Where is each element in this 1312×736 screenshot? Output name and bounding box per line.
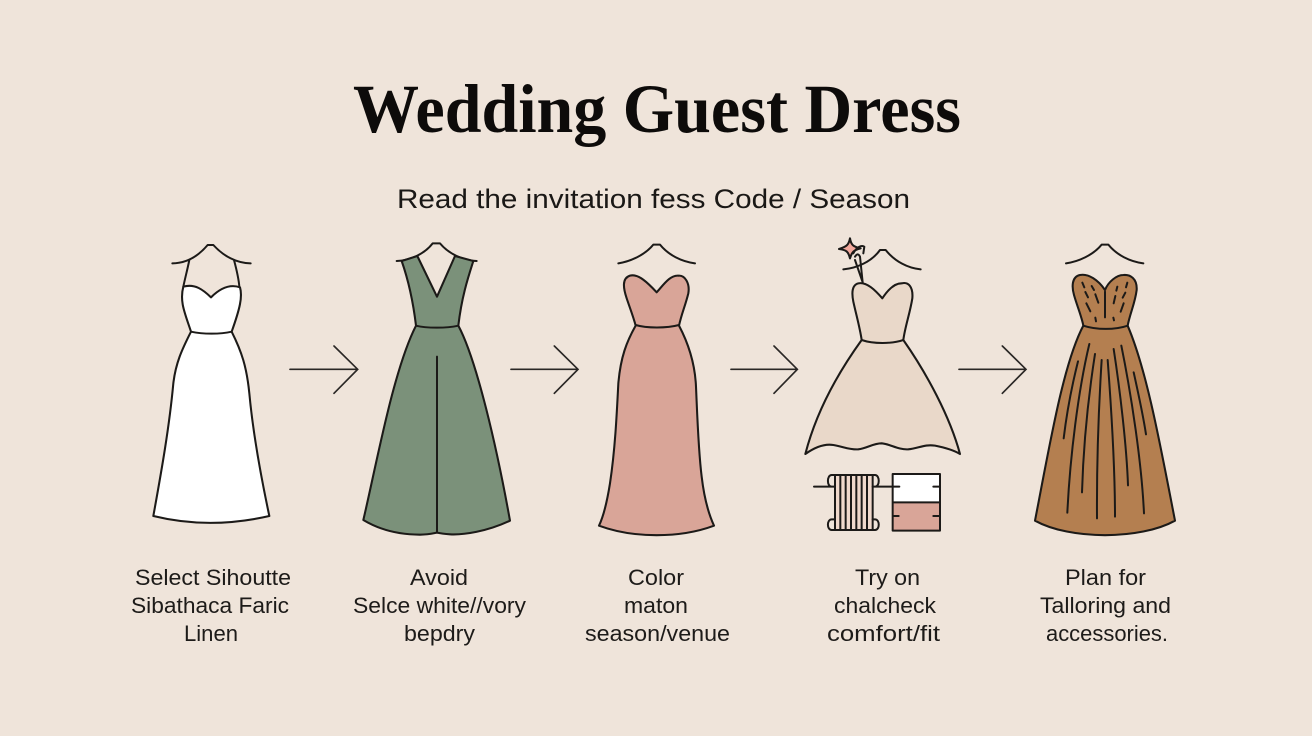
label: step 3: Color xyxy=(628,565,684,590)
label: step 5: accessories. xyxy=(1046,621,1168,646)
dress 2: green v-neck xyxy=(363,243,510,535)
label: step 4: Try on xyxy=(855,565,920,590)
title: Wedding Guest Dress xyxy=(353,71,961,147)
dress 4: beige flared dress xyxy=(805,250,960,454)
icon: fabric swatch xyxy=(893,474,940,531)
label: step 5: Talloring and xyxy=(1040,593,1171,618)
label: step 2: Selce white//vory xyxy=(353,593,526,618)
arrow 4 xyxy=(959,346,1026,393)
dress 3: rose gown xyxy=(599,245,714,535)
icon: sparkle accessory xyxy=(839,238,864,282)
label: step 3: season/venue xyxy=(585,621,730,646)
label: step 2: Avoid xyxy=(410,565,468,590)
subtitle: Read the invitation fess Code / Season xyxy=(397,184,910,214)
label: step 4 xyxy=(827,565,940,646)
label: step 1: Sibathaca Faric xyxy=(131,593,289,618)
label: step 5 xyxy=(1040,565,1171,646)
label: step 4: comfort/fit xyxy=(827,621,940,646)
label: step 1: Linen xyxy=(184,621,238,646)
label: step 4: chalcheck xyxy=(834,593,937,618)
label: step 5: Plan for xyxy=(1065,565,1146,590)
label: step 1: Select Sihoutte xyxy=(135,565,291,590)
icon: thread spool xyxy=(814,475,899,530)
label: step 2 xyxy=(353,565,526,646)
dress 5: brown pleated gown xyxy=(1035,245,1175,535)
label: step 1 xyxy=(131,565,291,646)
label: step 3 xyxy=(585,565,730,646)
label: step 2: bepdry xyxy=(404,621,475,646)
label: step 3: maton xyxy=(624,593,688,618)
arrow 1 xyxy=(290,346,358,393)
arrow 2 xyxy=(511,346,578,393)
arrow 3 xyxy=(731,346,797,393)
dress 1: white silhouette xyxy=(153,245,269,523)
